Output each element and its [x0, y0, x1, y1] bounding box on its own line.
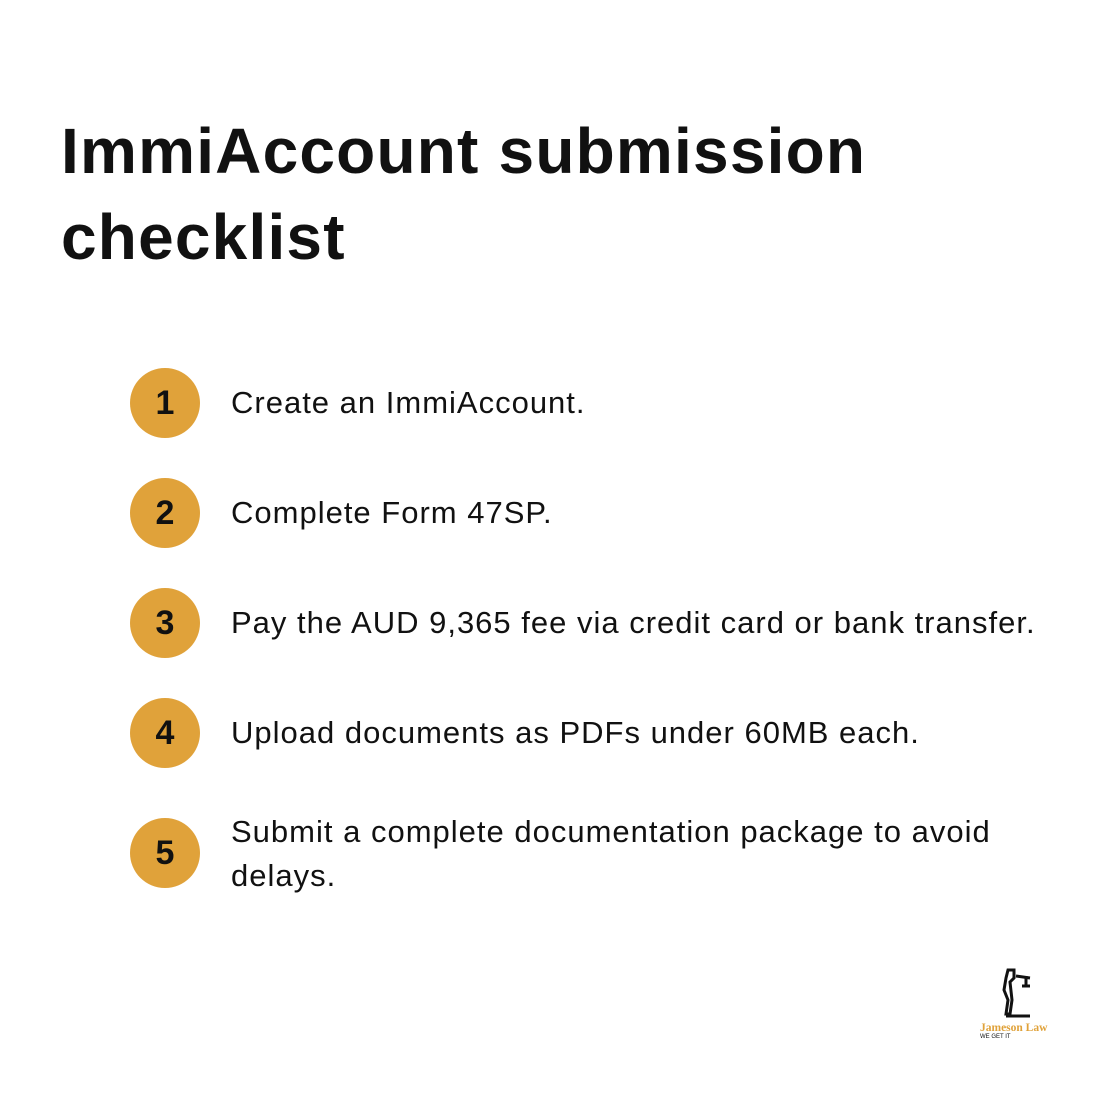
item 1: 1: [156, 384, 174, 422]
item 1: Create an ImmiAccount.: [231, 385, 586, 420]
item 5: Submit a complete documentation package to avoid delays.: [231, 814, 991, 893]
logo: [980, 968, 1048, 1040]
item 3: [130, 588, 1036, 658]
title: ImmiAccount submission: [61, 115, 866, 187]
item 5: 5: [156, 834, 174, 872]
item 4: Upload documents as PDFs under 60MB each.: [231, 715, 920, 750]
item 2: [130, 478, 553, 548]
item 3: 3: [156, 604, 174, 642]
title: [61, 115, 866, 273]
item 2: 2: [156, 494, 174, 532]
logo: Jameson Law: [980, 1022, 1047, 1034]
item 1: [130, 368, 586, 438]
item 3: Pay the AUD 9,365 fee via credit card or bank transfer.: [231, 605, 1036, 640]
title: checklist: [61, 201, 346, 273]
item 4: 4: [156, 714, 174, 752]
logo: WE GET IT: [980, 1034, 1011, 1040]
item 4: [130, 698, 920, 768]
item 2: Complete Form 47SP.: [231, 495, 553, 530]
